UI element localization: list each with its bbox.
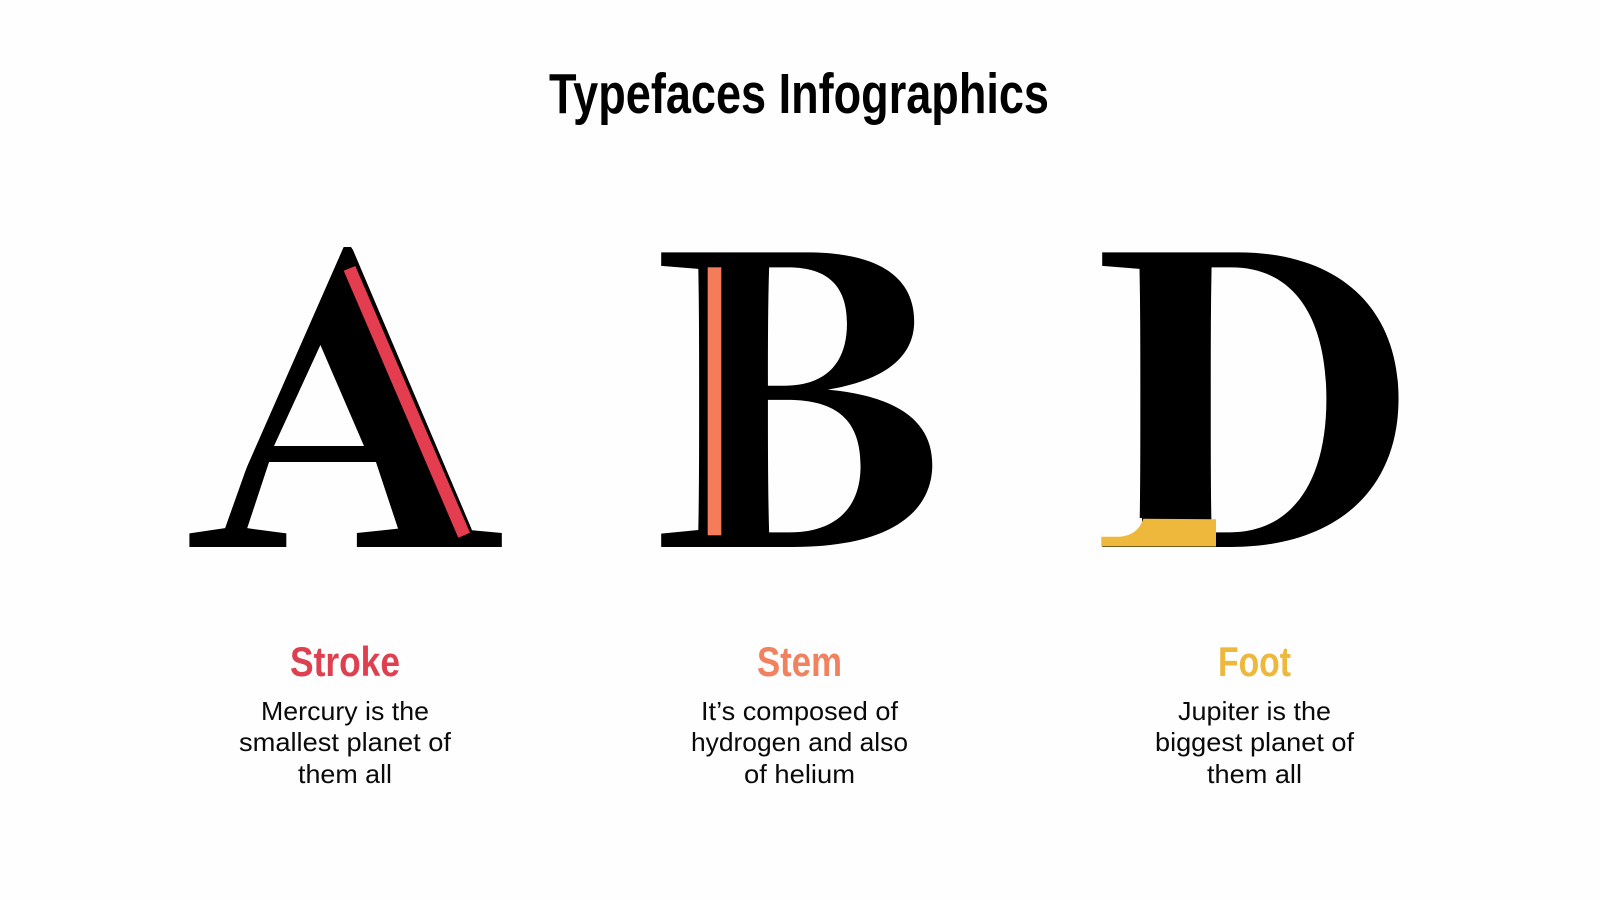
letter A: A (184, 88, 507, 662)
text: stroke description: smallest planet of (239, 727, 452, 757)
panel: foot (1101, 252, 1399, 784)
letter D: D (1085, 93, 1416, 660)
panel: stem (644, 94, 944, 789)
text: stroke description: Mercury is the (261, 696, 429, 726)
panel: stroke (189, 247, 502, 784)
title: Typefaces Infographics (549, 62, 1049, 126)
text: stroke description: them all (298, 759, 392, 789)
text: stem description: It’s composed of (701, 696, 899, 726)
text: stem description: of helium (744, 759, 855, 789)
text: stroke description (239, 696, 452, 789)
text: foot description: them all (1207, 759, 1302, 789)
letter A (189, 247, 502, 547)
heading: foot: Foot (1218, 638, 1291, 685)
text: foot description: Jupiter is the (1178, 696, 1331, 726)
text: stem description: hydrogen and also (691, 727, 908, 757)
letter B: B (644, 94, 944, 660)
text: stem description (691, 696, 908, 789)
heading: stem: Stem (757, 638, 842, 685)
highlight: stroke (344, 266, 470, 538)
highlight: foot (1101, 519, 1216, 546)
text: foot description (1155, 696, 1355, 789)
highlight: stem (708, 267, 721, 535)
heading: stroke: Stroke (290, 638, 400, 685)
text: foot description: biggest planet of (1155, 727, 1355, 757)
